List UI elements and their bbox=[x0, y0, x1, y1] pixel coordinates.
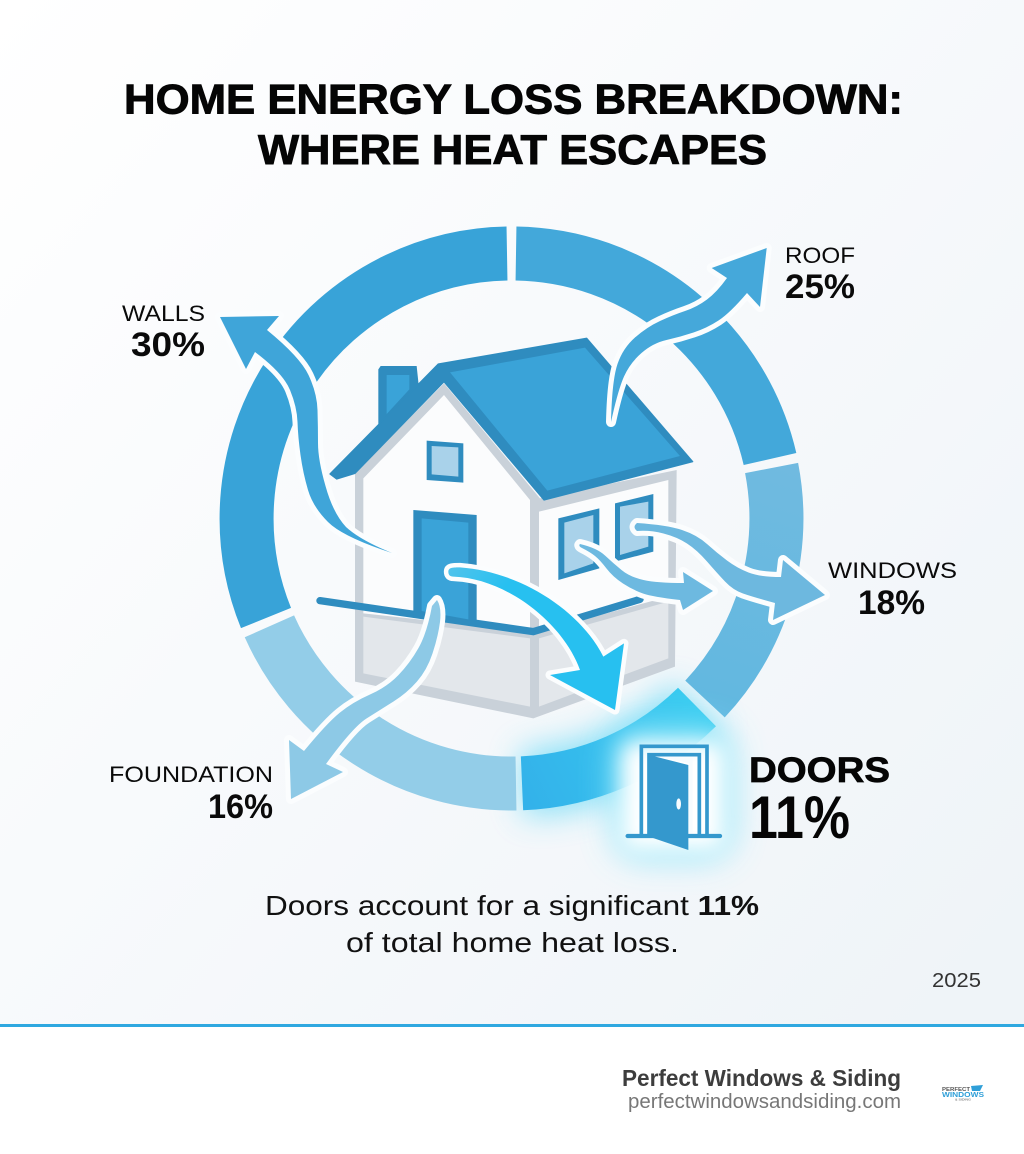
label: walls: WALLS bbox=[122, 301, 205, 326]
ring segment: foundation bbox=[269, 626, 516, 784]
label: roof bbox=[785, 243, 855, 306]
footer logo: WINDOWS bbox=[942, 1092, 984, 1099]
ring segment: walls bbox=[247, 254, 507, 618]
footer website: perfectwindowsandsiding.com bbox=[628, 1091, 901, 1113]
footer company name: Perfect Windows & Siding bbox=[622, 1065, 901, 1091]
house bbox=[320, 338, 693, 718]
door icon glow bbox=[612, 725, 734, 860]
arrow: roof bbox=[611, 248, 767, 422]
chimney bbox=[378, 366, 419, 427]
ring segment: windows bbox=[705, 468, 776, 699]
label: foundation bbox=[109, 762, 273, 826]
ring segment: roof bbox=[516, 254, 770, 459]
door knob bbox=[676, 798, 681, 810]
title: WHERE HEAT ESCAPES bbox=[258, 126, 767, 173]
footer logo bbox=[942, 1085, 984, 1102]
side window right bbox=[615, 494, 653, 562]
label: windows bbox=[828, 558, 957, 622]
arrow: windows upper bbox=[634, 523, 825, 620]
title bbox=[124, 76, 903, 173]
label: foundation: 16% bbox=[208, 788, 273, 826]
roof bbox=[330, 338, 693, 500]
label: walls bbox=[122, 301, 205, 364]
year: 2025 bbox=[932, 970, 981, 992]
door threshold bbox=[628, 829, 720, 842]
label: windows: WINDOWS bbox=[828, 558, 957, 583]
arrow: foundation bbox=[289, 600, 440, 799]
door leaf bbox=[649, 755, 688, 850]
ring segment: doors bbox=[522, 707, 697, 783]
label: doors: 11% bbox=[749, 784, 850, 851]
side window left bbox=[558, 508, 599, 580]
label: doors: DOORS bbox=[749, 751, 890, 790]
ring chart bbox=[247, 254, 776, 784]
door jamb opening bbox=[667, 758, 693, 833]
icon: open door bbox=[628, 746, 720, 850]
side wall bbox=[539, 480, 668, 632]
label: roof: ROOF bbox=[785, 243, 855, 268]
footer logo: PERFECT bbox=[942, 1087, 970, 1093]
inner door frame bbox=[649, 755, 699, 835]
heat arrows bbox=[220, 248, 825, 799]
title: HOME ENERGY LOSS BREAKDOWN: bbox=[124, 76, 903, 122]
label: doors bbox=[749, 751, 890, 851]
door icon glow core bbox=[622, 742, 724, 850]
caption: Doors account for a significant 11% bbox=[265, 890, 759, 921]
house wall frame bbox=[355, 383, 677, 718]
arrow: windows lower bbox=[579, 544, 713, 610]
attic window bbox=[427, 441, 463, 483]
caption bbox=[265, 890, 759, 958]
front foundation bbox=[363, 617, 530, 707]
label: roof: 25% bbox=[785, 268, 855, 306]
label: foundation: FOUNDATION bbox=[109, 762, 273, 787]
footer logo: & SIDING bbox=[955, 1098, 972, 1102]
front door bbox=[413, 510, 477, 622]
label: windows: 18% bbox=[858, 584, 925, 622]
label: walls: 30% bbox=[131, 326, 205, 364]
arrow: walls bbox=[220, 316, 392, 553]
front wall bbox=[363, 395, 530, 632]
footer bbox=[0, 1024, 1024, 1154]
caption: of total home heat loss. bbox=[346, 927, 679, 958]
door segment glow bbox=[522, 707, 697, 783]
side foundation bbox=[539, 602, 668, 707]
door frame bbox=[641, 746, 707, 835]
arrow: doors bbox=[448, 567, 624, 710]
foundation line bbox=[320, 599, 640, 632]
